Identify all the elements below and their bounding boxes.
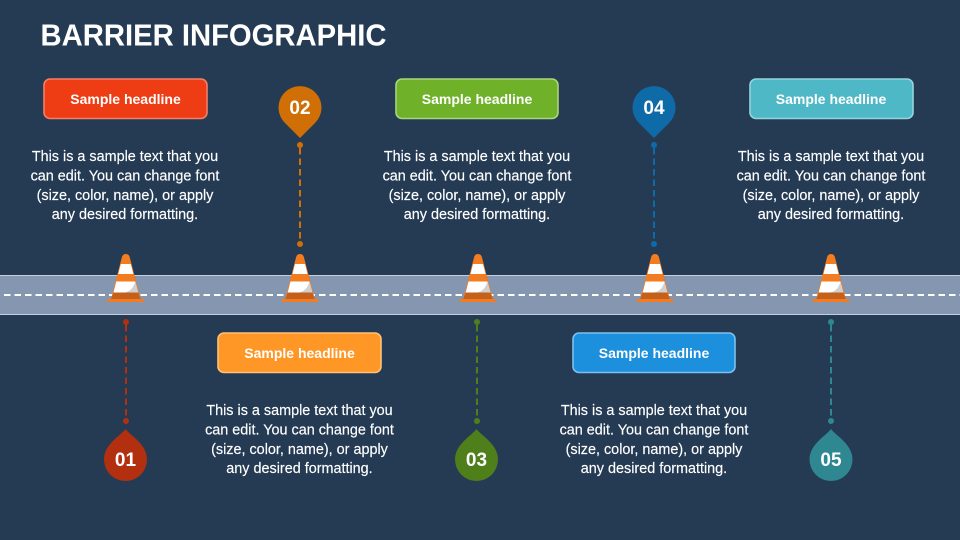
step 5: headline box: Sample headline bbox=[776, 91, 886, 107]
step 4: body text: can edit. You can change font bbox=[560, 422, 748, 438]
step 4: headline box bbox=[573, 333, 735, 372]
step 1: headline box bbox=[44, 79, 207, 118]
step 5: body text: any desired formatting. bbox=[758, 207, 904, 223]
step 5: connector bbox=[828, 319, 834, 424]
road bbox=[0, 276, 960, 314]
step 1: number pin bbox=[104, 429, 147, 481]
step 1: body text: can edit. You can change font bbox=[31, 168, 219, 184]
step 2: number pin bbox=[278, 86, 321, 138]
step 4: body text: (size, color, name), or apply bbox=[566, 442, 743, 458]
step 3: headline box bbox=[396, 79, 558, 118]
traffic cone 2 bbox=[282, 254, 318, 302]
step 3: number pin bbox=[455, 429, 498, 481]
step 3: body text: This is a sample text that you bbox=[384, 149, 570, 165]
step 2: body text: can edit. You can change font bbox=[205, 422, 394, 438]
traffic cone 5 bbox=[813, 254, 849, 302]
step 4: body text: This is a sample text that you bbox=[561, 403, 747, 419]
step 3: body text: any desired formatting. bbox=[404, 207, 550, 223]
step 2: body text: (size, color, name), or apply bbox=[211, 442, 389, 458]
step 5: body text: This is a sample text that you bbox=[738, 149, 924, 165]
step 1: connector bbox=[123, 319, 129, 424]
step 4: number pin: 04 bbox=[643, 98, 665, 119]
step 4: headline box: Sample headline bbox=[599, 345, 709, 361]
step 4: body text bbox=[560, 403, 748, 477]
step 3: body text: (size, color, name), or apply bbox=[389, 188, 566, 204]
step 1: body text: This is a sample text that you bbox=[32, 149, 218, 165]
step 3: body text bbox=[383, 149, 571, 223]
step 5: body text: can edit. You can change font bbox=[737, 168, 925, 184]
step 4: number pin bbox=[633, 86, 676, 138]
step 4: body text: any desired formatting. bbox=[581, 461, 727, 477]
step 5: body text: (size, color, name), or apply bbox=[743, 188, 920, 204]
traffic cone 1 bbox=[108, 254, 144, 302]
step 5: number pin: 05 bbox=[820, 450, 842, 471]
step 3: connector bbox=[474, 319, 480, 424]
step 3: headline box: Sample headline bbox=[422, 91, 532, 107]
step 2: body text bbox=[205, 403, 394, 477]
step 5: body text bbox=[737, 149, 925, 223]
step 2: body text: any desired formatting. bbox=[226, 461, 373, 477]
step 1: body text bbox=[31, 149, 219, 223]
step 1: body text: any desired formatting. bbox=[52, 207, 198, 223]
title: BARRIER INFOGRAPHIC bbox=[40, 18, 386, 52]
step 1: number pin: 01 bbox=[115, 450, 136, 471]
traffic cone 3 bbox=[460, 254, 496, 302]
step 1: headline box: Sample headline bbox=[70, 91, 181, 107]
step 2: connector bbox=[297, 142, 303, 247]
step 4: connector bbox=[651, 142, 657, 247]
step 3: number pin: 03 bbox=[466, 450, 487, 471]
step 2: number pin: 02 bbox=[289, 98, 311, 119]
step 5: headline box bbox=[750, 79, 913, 118]
step 2: headline box bbox=[218, 333, 381, 372]
step 2: body text: This is a sample text that you bbox=[206, 403, 393, 419]
step 5: number pin bbox=[810, 429, 852, 481]
step 3: body text: can edit. You can change font bbox=[383, 168, 571, 184]
step 2: headline box: Sample headline bbox=[244, 345, 355, 361]
step 1: body text: (size, color, name), or apply bbox=[37, 188, 214, 204]
traffic cone 4 bbox=[637, 254, 673, 302]
